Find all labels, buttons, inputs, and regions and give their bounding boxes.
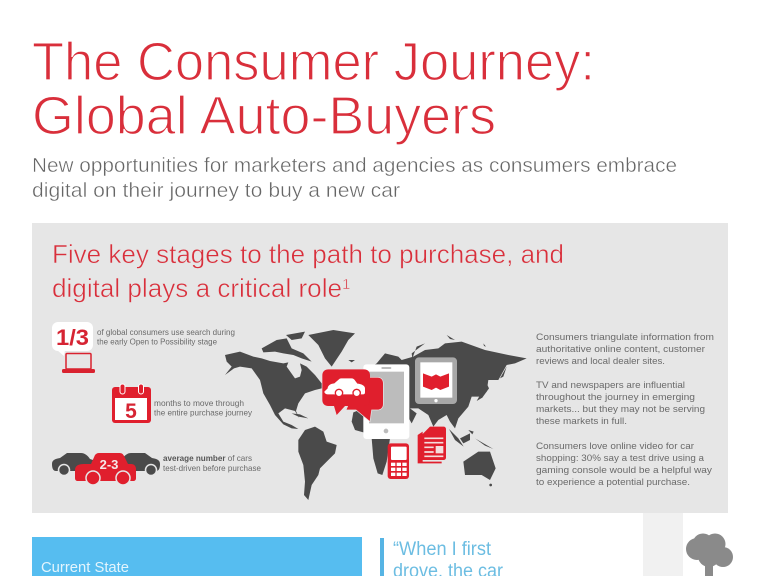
icon: calendar five months [112,384,151,423]
icon: three cars test drive: 2-3 [100,457,118,472]
panel heading [52,239,564,303]
icon: one third speech bubble and laptop: 1/3 [56,325,89,350]
pale vertical connector stripe [643,513,683,576]
panel: five key stages [32,223,728,513]
icon: one third speech bubble and laptop [52,322,95,373]
panel: current state: Current State [41,559,129,576]
text: insights column [536,332,714,488]
subtitle: New opportunities for marketers and agencies as consumers embrace [32,155,677,177]
text: insights column: to experience a potential purchase. [536,477,690,488]
text: search stat [97,327,235,346]
text: insights column: authoritative online content, customer [536,344,705,355]
icon: newspaper [418,427,446,463]
text: test drive stat: test-driven before purchase [163,463,261,473]
americas [225,330,370,500]
quote [380,538,504,576]
text: insights column: Consumers triangulate information from [536,332,714,343]
text: insights column: reviews and local dealer sites. [536,356,665,367]
icon: calendar five months: 5 [125,400,137,423]
icon: mobile phone [388,443,409,479]
quote: “When I first [393,539,492,560]
panel: current state [32,537,362,576]
text: insights column: these markets in full. [536,416,627,427]
subtitle: digital on their journey to buy a new car [32,180,400,202]
title: The Consumer Journey: [32,32,595,92]
icon: speech bubbles with car [322,369,383,422]
world map [225,330,527,500]
text: insights column: markets... but they may not be serving [536,404,705,415]
text: insights column: shopping: 30% say a test drive using a [536,453,705,464]
text: test drive stat: average number of cars [163,453,252,463]
text: insights column: throughout the journey in emerging [536,392,695,403]
text: test drive stat [163,453,261,473]
panel heading: digital plays a critical role [52,273,342,303]
icon: three cars test drive [52,453,160,485]
text: insights column: gaming console would be a helpful way [536,465,712,476]
panel heading: Five key stages to the path to purchase, and [52,239,564,269]
subtitle [32,155,677,202]
title: Global Auto-Buyers [32,86,496,146]
icon: smartphone [363,364,409,439]
text: months stat: months to move through [154,398,244,408]
icon: tree [686,534,733,576]
text: search stat: the early Open to Possibility stage [97,336,217,346]
text: insights column: TV and newspapers are influential [536,380,685,391]
title [32,32,595,146]
africa, eurasia and australia [372,335,527,486]
icon: tablet with map [415,357,457,404]
text: insights column: Consumers love online video for car [536,441,694,452]
text: search stat: of global consumers use search during [97,327,235,337]
text: months stat: the entire purchase journey [154,408,253,418]
panel heading: 1 [342,276,350,293]
text: months stat [154,398,253,418]
